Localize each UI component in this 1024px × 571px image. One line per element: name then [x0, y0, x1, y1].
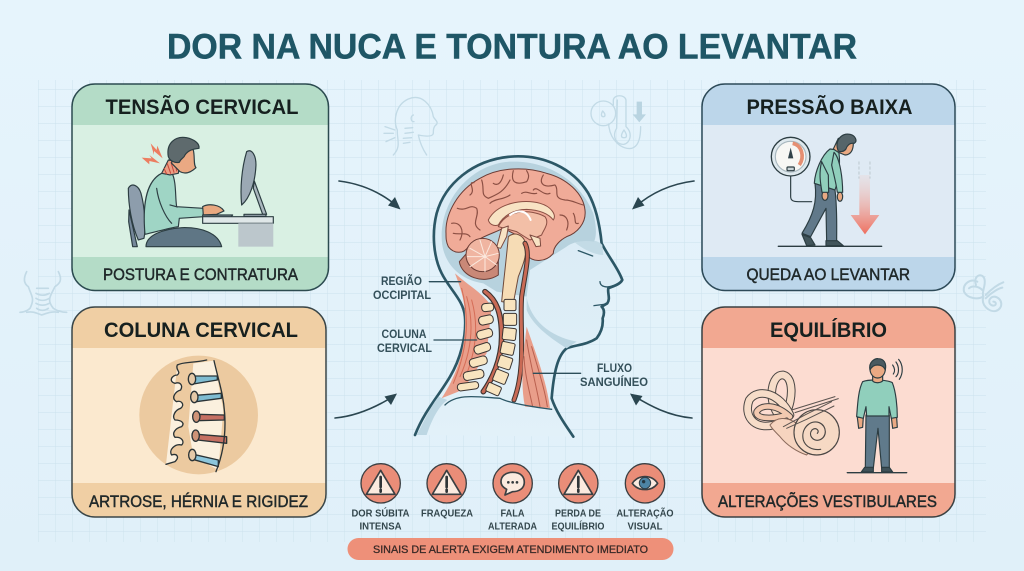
heading: coluna cervical: COLUNA CERVICAL: [104, 319, 298, 342]
brain: [446, 169, 585, 260]
label: coluna cervical: [377, 329, 432, 355]
label: região occipital: OCCIPITAL: [373, 290, 431, 302]
label: dor súbita intensa: INTENSA: [360, 520, 402, 532]
illustration: spine with discs: [139, 356, 258, 474]
icon: loss of balance warning: [559, 464, 598, 503]
label: região occipital: REGIÃO: [381, 275, 422, 288]
central anatomy: head and neck: [415, 156, 622, 437]
label: coluna cervical: CERVICAL: [377, 343, 432, 355]
arrow: cervical spine to centre: [335, 394, 397, 418]
label: perda de equilíbrio: EQUILÍBRIO: [552, 520, 604, 532]
label: coluna cervical: COLUNA: [382, 329, 426, 341]
neck muscle, back: [442, 273, 492, 398]
faint icon: neck spine: [20, 272, 67, 315]
alert signs row: [352, 464, 674, 532]
caption: queda ao levantar: QUEDA AO LEVANTAR: [746, 266, 910, 284]
cerebellum: [459, 238, 499, 279]
illustration: inner ear: [748, 375, 839, 455]
heading: pressão baixa: PRESSÃO BAIXA: [746, 96, 912, 119]
arrow: pressure to centre: [632, 181, 694, 210]
icon: sudden pain warning: [361, 464, 400, 503]
panel: coluna cervical: [72, 307, 326, 517]
label: fala alterada: FALA: [500, 508, 525, 520]
label: perda de equilíbrio: PERDA DE: [555, 508, 601, 520]
label: dor súbita intensa: [352, 506, 410, 532]
label: fluxo sanguíneo: [580, 363, 648, 389]
head outline: [415, 156, 622, 437]
label: alteração visual: [616, 506, 674, 532]
label: perda de equilíbrio: [552, 508, 604, 532]
label: alteração visual: VISUAL: [628, 520, 663, 532]
label: dor súbita intensa: DOR SÚBITA: [352, 506, 410, 520]
icon: weakness warning: [427, 464, 466, 503]
label: alteração visual: ALTERAÇÃO: [616, 506, 674, 520]
heading: tensão cervical: TENSÃO CERVICAL: [106, 96, 299, 119]
caption: alterações vestibulares: ALTERAÇÕES VESTIBULARES: [718, 491, 937, 511]
caption: postura e contratura: POSTURA E CONTRATURA: [103, 266, 298, 284]
faint icon: inner ear: [964, 275, 1003, 311]
alert banner: [348, 538, 674, 560]
illustration: person at computer: [128, 137, 273, 247]
illustration: standing person with sound waves: [847, 359, 907, 473]
label: região occipital: [373, 275, 431, 302]
panel: equilíbrio: [702, 307, 955, 517]
icon: speech bubble: [493, 464, 532, 503]
label: fluxo sanguíneo: SANGUÍNEO: [580, 376, 648, 389]
label: fluxo sanguíneo: FLUXO: [597, 363, 632, 375]
alert banner: SINAIS DE ALERTA EXIGEM ATENDIMENTO IMEDIATO: [373, 544, 648, 556]
title: DOR NA NUCA E TONTURA AO LEVANTAR: [167, 28, 857, 66]
heading: equilíbrio: EQUILÍBRIO: [770, 319, 887, 342]
faint icon: head and neck: [384, 98, 437, 155]
faint icon: pressure thermometer: [591, 96, 646, 149]
label: fala alterada: ALTERADA: [488, 520, 537, 532]
caption: artrose, hérnia e rigidez: ARTROSE, HÉRNIA E RIGIDEZ: [89, 492, 308, 511]
icon: eye: [625, 464, 665, 503]
panel: tensão cervical: [72, 84, 329, 291]
label: fraqueza: FRAQUEZA: [421, 508, 473, 520]
illustration: gauge, stooped person, down arrow: [771, 134, 882, 246]
cervical vertebrae: [457, 299, 517, 396]
neck muscle, front: [522, 327, 550, 408]
brain stem and spinal cord: [483, 234, 527, 400]
arrow: balance to centre: [630, 394, 692, 418]
panel: pressão baixa: [702, 84, 955, 291]
label: fala alterada: [488, 508, 537, 532]
arrow: tension to centre: [339, 181, 400, 210]
